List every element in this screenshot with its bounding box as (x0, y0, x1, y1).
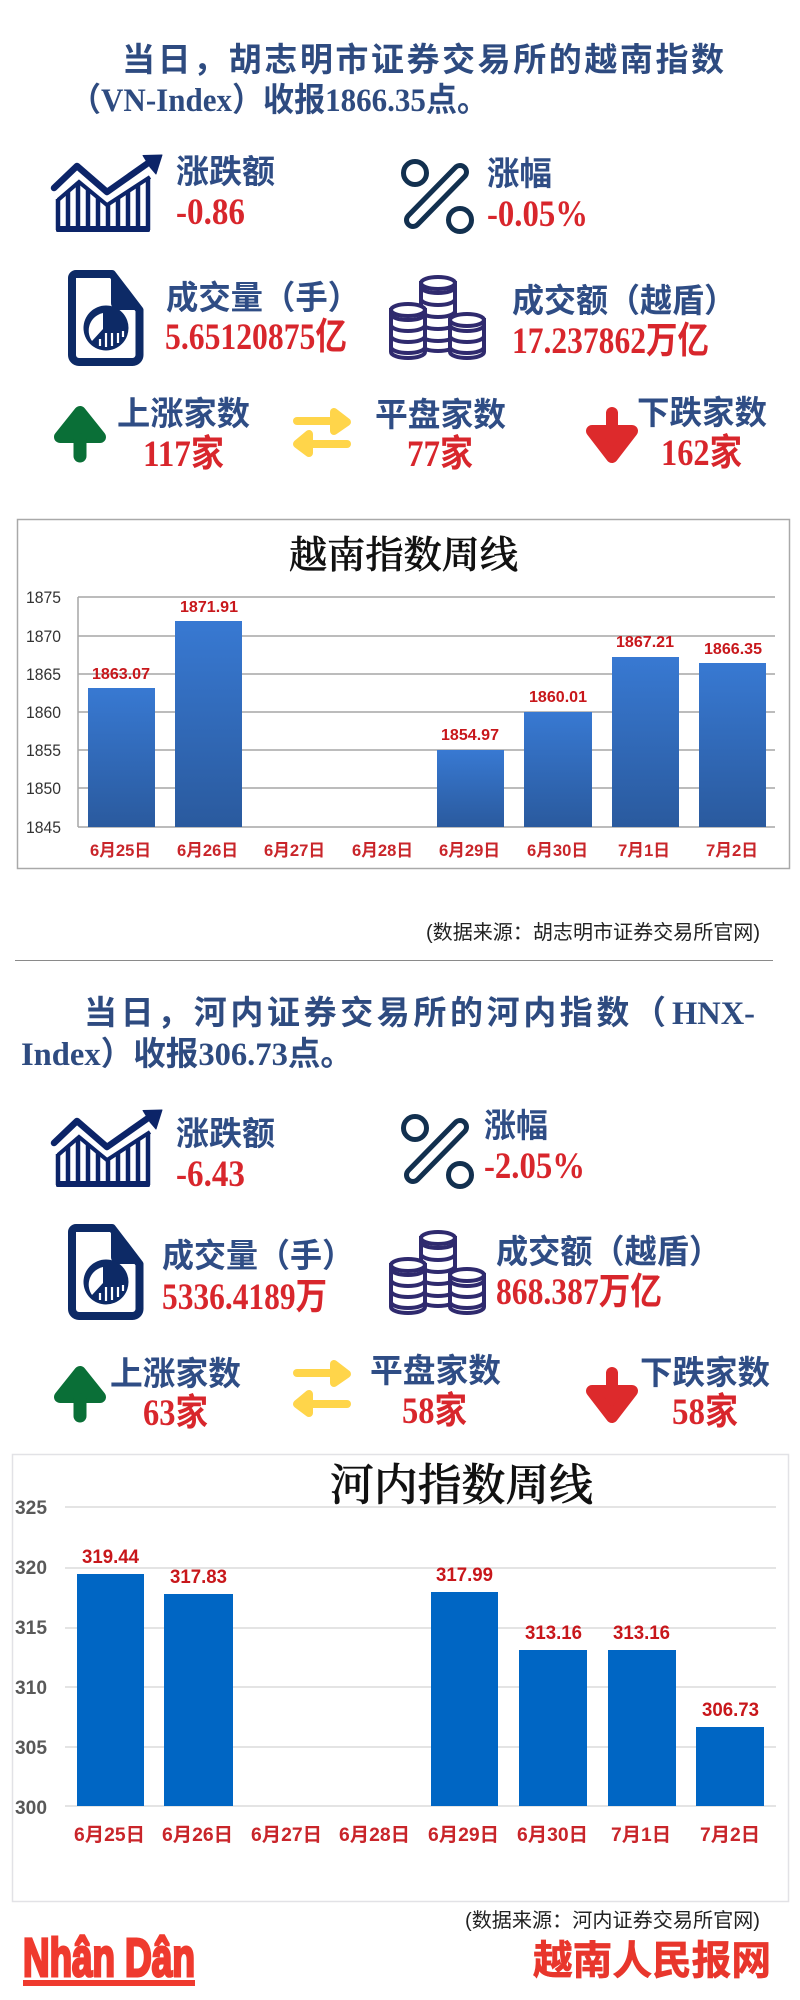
stat: volume: 5336.4189万 (162, 1277, 327, 1318)
chart: VN-Index weekly: 1875 (26, 588, 61, 607)
date labels (74, 1825, 760, 1846)
chart: HNX-Index weekly: 305 (15, 1738, 47, 1759)
stat: change percent (487, 155, 588, 235)
date labels: 7月2日 (706, 841, 758, 860)
stat: unchanged (375, 396, 506, 475)
icon: yellow arrows (297, 412, 347, 453)
date labels: 6月28日 (339, 1825, 410, 1846)
chart: HNX-Index weekly: 310 (15, 1678, 47, 1699)
icon: trend chart (54, 1110, 162, 1187)
icon: document with pie chart (72, 1225, 143, 1316)
stat: change percent: 涨幅 (484, 1107, 548, 1144)
stat: advancers (110, 1355, 241, 1434)
date labels: 6月26日 (177, 841, 238, 860)
icon: percent (404, 1116, 472, 1186)
icon: red down arrow (592, 413, 632, 457)
source note: HOSE: (数据来源：胡志明市证券交易所官网) (426, 921, 760, 944)
stat: change: 涨跌额 (176, 1115, 275, 1152)
value labels: 1854.97 (441, 727, 499, 744)
date labels: 6月27日 (251, 1825, 322, 1846)
date labels: 6月27日 (264, 841, 325, 860)
date labels: 6月25日 (74, 1825, 145, 1846)
panel: VN-Index summary (54, 42, 767, 475)
icon: coin stacks (391, 1232, 484, 1313)
stat: advancers: 上涨家数 (117, 395, 250, 432)
icon: coin stacks (391, 277, 484, 358)
stat: volume: 5.65120875亿 (165, 316, 347, 358)
heading: HNX-Index close: 当日，河内证券交易所的河内指数（ (84, 995, 666, 1032)
heading: VN-Index close: （VN-Index）收报1866.35点。 (70, 82, 488, 119)
stat: decliners: 162家 (661, 432, 742, 474)
value labels: 313.16 (525, 1623, 582, 1644)
date labels: 7月1日 (618, 841, 670, 860)
stat: turnover: 17.237862万亿 (512, 320, 709, 362)
heading: VN-Index close: 当日，胡志明市证券交易所的越南指数 (122, 42, 724, 79)
stat: volume (162, 1237, 354, 1318)
value labels: 1860.01 (529, 689, 587, 706)
chart: VN-Index weekly: 1865 (26, 665, 61, 684)
date labels: 6月25日 (90, 841, 151, 860)
value labels: 1863.07 (92, 666, 150, 683)
date labels: 6月28日 (352, 841, 413, 860)
date labels: 7月2日 (700, 1825, 760, 1846)
stat: turnover: 868.387万亿 (496, 1271, 662, 1313)
icon: document with pie chart (72, 271, 143, 362)
stat: unchanged: 平盘家数 (370, 1352, 501, 1389)
date labels: 6月30日 (517, 1825, 588, 1846)
value labels (92, 599, 762, 744)
stat: change percent: -0.05% (487, 194, 588, 235)
value labels: 319.44 (82, 1547, 139, 1568)
chart: VN-Index weekly: 1870 (26, 627, 61, 646)
stat: turnover (496, 1233, 721, 1313)
heading: VN-Index close (70, 42, 724, 119)
stat: unchanged: 平盘家数 (375, 396, 506, 433)
chart title: 越南指数周线 (289, 535, 518, 577)
date labels (90, 841, 758, 860)
stat: advancers: 上涨家数 (110, 1355, 241, 1392)
chart: HNX-Index weekly: 300 (15, 1798, 47, 1819)
stat: change (176, 1115, 275, 1195)
value labels: 306.73 (702, 1700, 759, 1721)
icon: green up arrow (60, 412, 100, 456)
stat: change: -0.86 (176, 192, 245, 233)
stat: decliners: 下跌家数 (637, 394, 767, 431)
stat: advancers: 63家 (143, 1392, 208, 1434)
stat: change percent: 涨幅 (487, 155, 552, 192)
stat: volume (165, 279, 360, 358)
icon: red down arrow (592, 1373, 632, 1417)
chart: HNX-Index weekly: 320 (15, 1558, 47, 1579)
panel: HNX-Index summary (21, 995, 770, 1434)
icon: yellow arrows (297, 1364, 347, 1413)
chart: VN-Index weekly: 1845 (26, 818, 61, 837)
chart: HNX-Index weekly: 325 (15, 1498, 47, 1519)
stat: decliners (637, 394, 767, 474)
bars (77, 1574, 764, 1806)
date labels: 6月30日 (527, 841, 588, 860)
icon: trend chart (54, 155, 162, 232)
chart: VN-Index weekly: 1860 (26, 703, 61, 722)
stat: decliners: 下跌家数 (640, 1354, 770, 1391)
stat: advancers: 117家 (143, 433, 224, 475)
date labels: 7月1日 (611, 1825, 671, 1846)
stat: decliners (640, 1354, 770, 1433)
value labels: 317.83 (170, 1567, 227, 1588)
icon: percent (404, 162, 472, 232)
value labels: 1871.91 (180, 599, 238, 616)
stat: unchanged: 58家 (402, 1390, 467, 1432)
bars (88, 621, 766, 827)
chart: VN-Index weekly: 1855 (26, 741, 61, 760)
heading: HNX-Index close: Index）收报306.73点。 (21, 1036, 353, 1073)
stat: decliners: 58家 (672, 1391, 738, 1433)
value labels: 313.16 (613, 1623, 670, 1644)
logo: site name: 越南人民报网 (533, 1939, 771, 1983)
stat: volume: 成交量（手） (166, 279, 360, 316)
source note: HNX: (数据来源：河内证券交易所官网) (465, 1909, 760, 1932)
heading: HNX-Index close (21, 995, 755, 1073)
logo: Nhan Dan: Dân (125, 1928, 195, 1988)
stat: unchanged: 77家 (407, 433, 473, 475)
value labels: 317.99 (436, 1565, 493, 1586)
icon: green up arrow (60, 1372, 100, 1416)
logo: Nhan Dan: Nhân (23, 1928, 115, 1988)
stat: unchanged (370, 1352, 501, 1432)
stat: change (176, 153, 275, 233)
stat: change percent: -2.05% (484, 1146, 585, 1187)
chart: VN-Index weekly: 1850 (26, 779, 61, 798)
heading: HNX-Index close: HNX- (672, 996, 755, 1032)
stat: change: -6.43 (176, 1154, 245, 1195)
chart: HNX-Index weekly: 315 (15, 1618, 47, 1639)
chart: VN-Index weekly (18, 520, 790, 868)
stat: turnover: 成交额（越盾） (512, 282, 736, 319)
stat: advancers (117, 395, 250, 475)
stat: change: 涨跌额 (176, 153, 275, 190)
date labels: 6月29日 (428, 1825, 499, 1846)
date labels: 6月29日 (439, 841, 500, 860)
value labels (82, 1547, 759, 1721)
date labels: 6月26日 (162, 1825, 233, 1846)
stat: change percent (484, 1107, 585, 1187)
stat: volume: 成交量（手） (162, 1237, 354, 1274)
stat: turnover: 成交额（越盾） (496, 1233, 721, 1270)
chart title: 河内指数周线 (330, 1461, 593, 1510)
value labels: 1866.35 (704, 641, 762, 658)
stat: turnover (512, 282, 736, 362)
value labels: 1867.21 (616, 634, 674, 651)
chart: HNX-Index weekly (12, 1454, 788, 1902)
